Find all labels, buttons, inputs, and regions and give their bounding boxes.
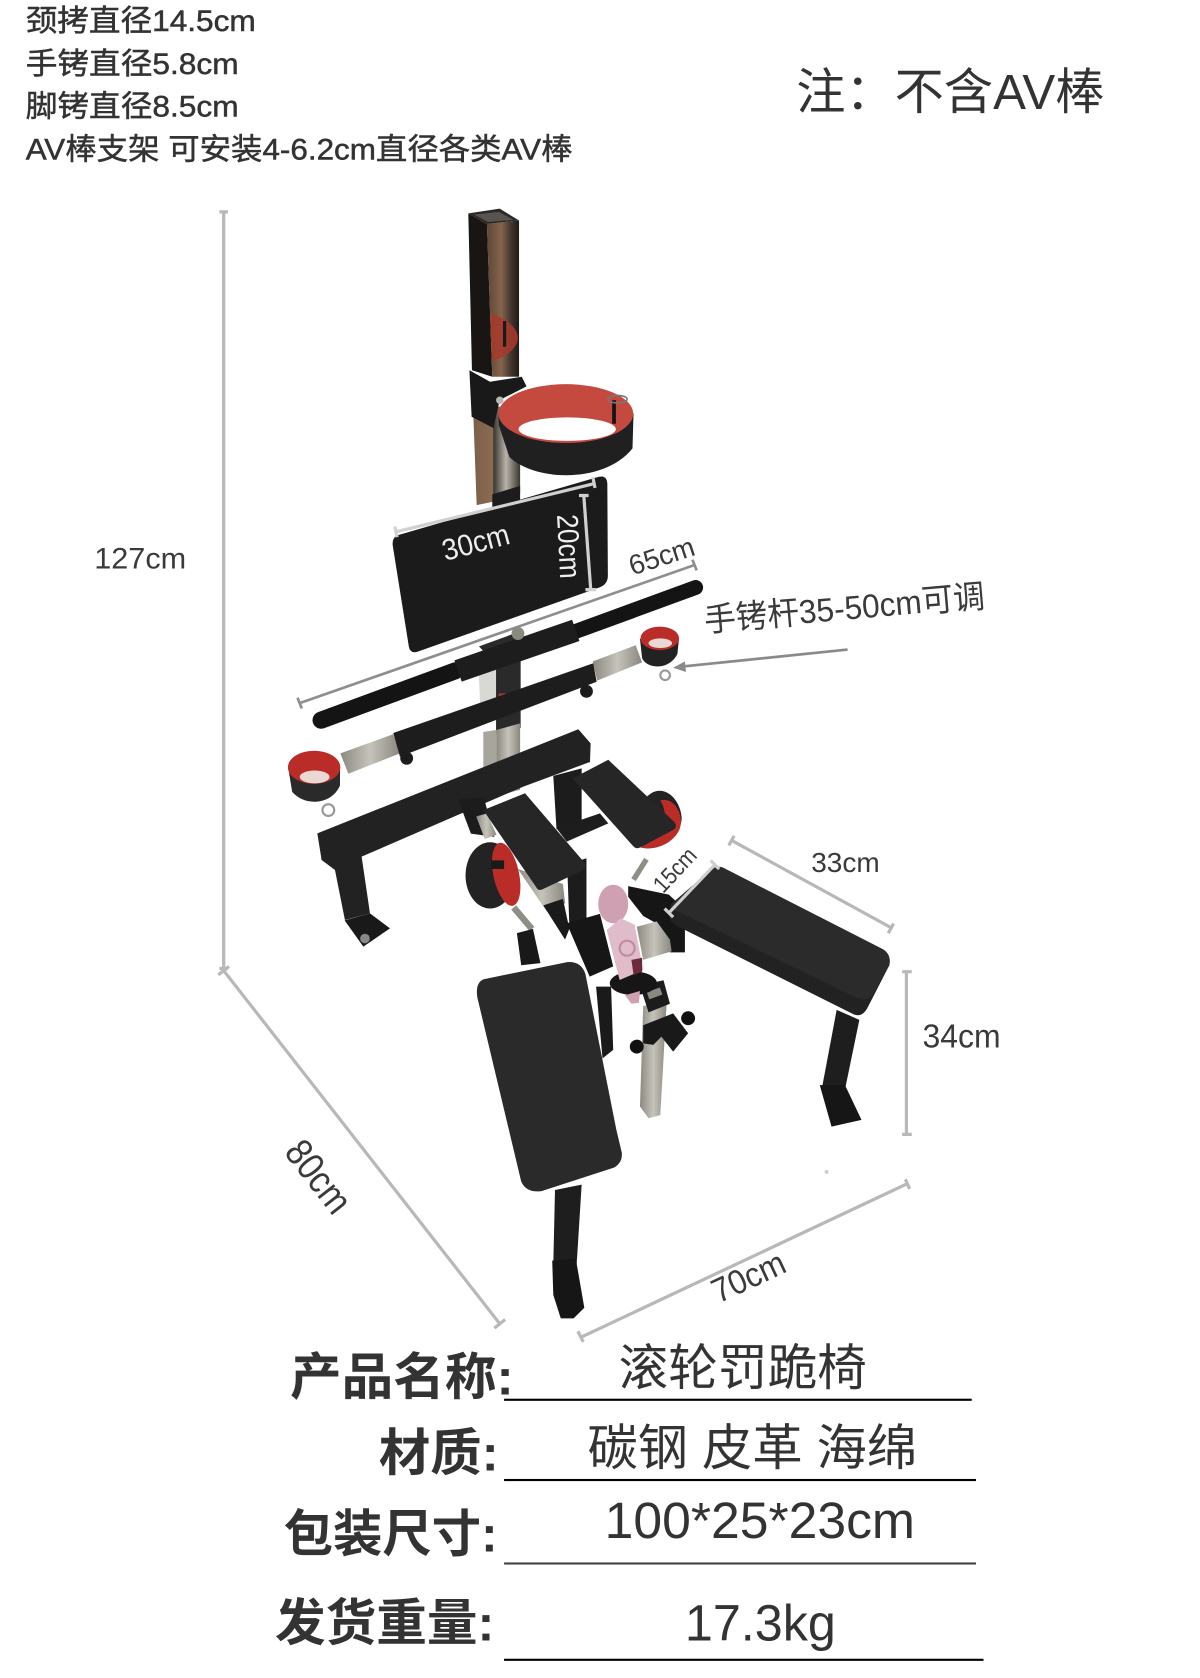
- neck collar: [496, 384, 634, 475]
- rear frame beam and legs: [317, 729, 591, 947]
- handcuff rod: [321, 588, 696, 720]
- row: package size: [284, 1492, 976, 1565]
- back pad width dimension: [395, 477, 595, 568]
- massager: [598, 885, 643, 1004]
- row: product name: 滚轮罚跪椅: [619, 1341, 867, 1396]
- right wrist cuff: [640, 627, 679, 680]
- bar length dimension line: [298, 560, 697, 708]
- width dimension line: [578, 1179, 910, 1342]
- specification list: AV棒支架 可安装4-6.2cm直径各类AV棒: [26, 133, 573, 166]
- row: shipping weight: 17.3kg: [685, 1595, 836, 1652]
- label: width: 70cm: [706, 1244, 792, 1311]
- back pad: [393, 476, 608, 652]
- left wrist cuff: [288, 751, 340, 816]
- row: material: 材质:: [379, 1424, 499, 1481]
- specification list: [26, 5, 573, 166]
- central chassis: [458, 797, 685, 977]
- row: product name: [290, 1341, 972, 1405]
- label: depth: 80cm: [276, 1132, 360, 1222]
- shin rest width dimension: [648, 842, 719, 917]
- specification list: 颈拷直径14.5cm: [26, 5, 256, 38]
- label: seat height: 34cm: [922, 1019, 1001, 1056]
- row: shipping weight: 发货重量:: [275, 1595, 494, 1652]
- row: package size: 100*25*23cm: [605, 1492, 915, 1549]
- row: material: [379, 1421, 976, 1481]
- left seat bench: [477, 962, 622, 1318]
- right seat bench: [669, 867, 890, 1127]
- specification list: 脚铐直径8.5cm: [26, 91, 239, 124]
- arrow: points to wrist cuff: [673, 650, 848, 672]
- label: seat length: 33cm: [811, 847, 880, 878]
- note: 注：不含AV棒: [796, 65, 1104, 120]
- product: kneeling chair: [288, 209, 890, 1318]
- row: package size: 包装尺寸:: [284, 1506, 498, 1563]
- depth dimension line: [218, 966, 505, 1328]
- back pad width dimension: 30cm: [439, 518, 513, 568]
- massager holder and adjustable stand: [610, 971, 695, 1118]
- label: bar length: 65cm: [625, 531, 698, 581]
- specification list: 手铐直径5.8cm: [26, 48, 239, 81]
- central column: [478, 631, 521, 796]
- row: material: 碳钢 皮革 海绵: [588, 1421, 917, 1476]
- label: adjustable bar: 手铐杆35-50cm可调: [703, 578, 986, 640]
- right ankle cuff: [634, 791, 682, 880]
- back pad height dimension: [550, 495, 596, 590]
- shin rest width dimension: 15cm: [648, 842, 702, 898]
- seat height dimension line: [902, 972, 912, 1134]
- row: product name: 产品名称:: [290, 1348, 514, 1405]
- overall height dimension line: [219, 212, 228, 968]
- speck: [825, 1170, 829, 1174]
- knee pads: [483, 760, 676, 890]
- back pad height dimension: 20cm: [550, 513, 586, 579]
- upper adjustable bar: [340, 645, 642, 774]
- row: shipping weight: [275, 1595, 983, 1661]
- product details table: [275, 1341, 983, 1661]
- label: height: 127cm: [94, 542, 186, 575]
- left ankle cuff: [466, 840, 525, 909]
- seat length dimension line: [729, 836, 894, 933]
- upright post: [468, 209, 527, 509]
